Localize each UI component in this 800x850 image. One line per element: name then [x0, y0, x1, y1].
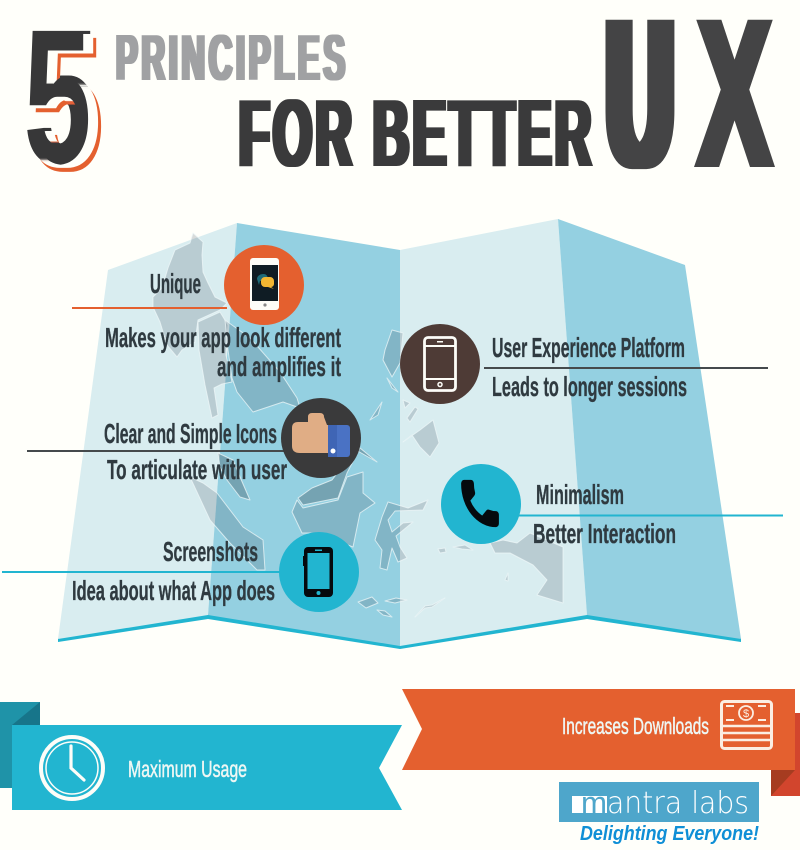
ribbon: increases downloads	[402, 689, 800, 796]
logo background	[559, 782, 759, 822]
callout: user experience platform	[400, 324, 768, 404]
icon: outlined phone	[400, 324, 480, 404]
logo: mantra labs	[559, 782, 759, 822]
text: Better Interaction	[533, 518, 676, 549]
label: Increases Downloads	[562, 713, 709, 739]
map panel 2	[208, 223, 400, 646]
line	[72, 307, 227, 309]
title	[27, 0, 772, 213]
map panel 4	[558, 219, 741, 639]
ribbon body	[402, 689, 795, 770]
line	[27, 450, 285, 452]
numeral 5	[27, 0, 101, 211]
unique text: Makes your app look different	[105, 322, 341, 353]
text: Idea about what App does	[72, 575, 275, 606]
ribbon fold	[12, 702, 40, 725]
folded map	[58, 219, 741, 649]
icon: clock	[41, 737, 103, 799]
map panel 3	[400, 219, 587, 646]
icon: phone with chat bubbles	[224, 245, 304, 325]
unique heading: Unique	[150, 268, 201, 299]
unique text: and amplifies it	[217, 351, 341, 382]
ribbon: maximum usage	[0, 702, 402, 810]
icon: telephone handset	[441, 464, 521, 544]
ribbon body	[12, 725, 402, 810]
text: To articulate with user	[107, 454, 287, 485]
unique text	[105, 322, 341, 382]
ribbon tail	[771, 713, 800, 796]
callout: minimalism	[441, 464, 783, 549]
line	[484, 367, 768, 369]
map bottom edge	[58, 614, 741, 649]
icon: smartphone	[279, 532, 359, 612]
icon: thumbs up	[281, 398, 361, 478]
land masses	[153, 233, 563, 617]
icon: banknotes	[721, 702, 772, 748]
callout: clear and simple icons	[27, 398, 361, 485]
map panel 1	[58, 223, 237, 639]
heading: for better: FOR BETTER	[239, 81, 591, 187]
line	[518, 514, 783, 516]
ribbon fold	[771, 770, 795, 796]
line	[2, 571, 282, 573]
logo m: m	[581, 785, 607, 820]
callout: screenshots	[2, 532, 359, 612]
heading: principles: PRINCIPLES	[116, 21, 345, 94]
ribbon tail	[0, 702, 40, 788]
logo wordmark: antra labs	[607, 786, 749, 821]
logo m block	[572, 796, 607, 813]
icon: banknotes: $	[743, 708, 749, 720]
heading: Clear and Simple Icons	[104, 418, 277, 449]
tagline: Delighting Everyone!	[580, 823, 759, 845]
heading: Screenshots	[163, 536, 258, 567]
callout: unique	[72, 245, 341, 382]
heading: Minimalism	[536, 479, 624, 510]
numeral 5: 5	[33, 0, 101, 211]
label: Maximum Usage	[128, 756, 247, 782]
darker land masses	[218, 448, 377, 505]
